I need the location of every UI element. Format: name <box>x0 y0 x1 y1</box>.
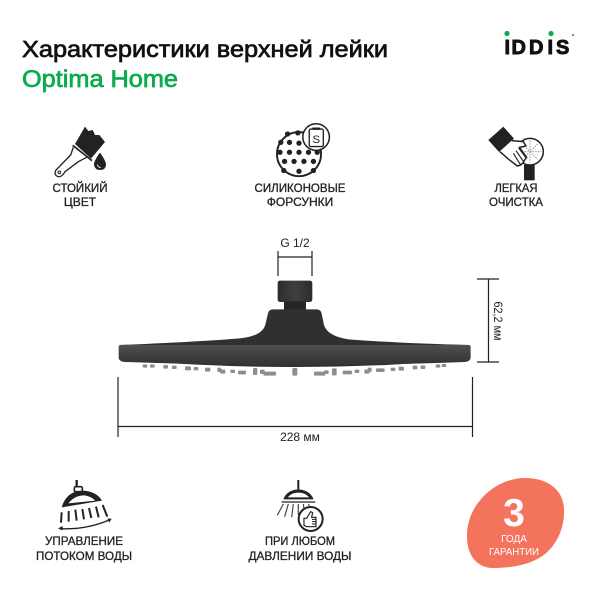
connector <box>278 281 312 302</box>
label: легкая очистка <box>489 181 543 209</box>
logo: IDDIS: IDDIS <box>504 37 569 59</box>
icon: easy cleaning <box>488 127 543 180</box>
dimension: width 228 mm <box>118 377 472 444</box>
warranty badge <box>467 478 564 568</box>
label: силиконовые форсунки <box>254 181 346 209</box>
icon: paint brush <box>55 127 106 177</box>
icon: silicone nozzles: S <box>312 134 320 146</box>
label: стойкий цвет: СТОЙКИЙ <box>52 180 108 195</box>
icon: flow control <box>58 480 112 530</box>
warranty badge: 3 <box>503 492 525 535</box>
label: легкая очистка: ЛЕГКАЯ <box>494 181 538 195</box>
collar and top <box>119 309 471 347</box>
dimension: G 1/2: G 1/2 <box>280 236 310 250</box>
label: управление потоком воды <box>36 534 132 563</box>
label: при любом давлении воды: ПРИ ЛЮБОМ <box>265 534 335 548</box>
dimension: height 62,2 mm: 62,2 мм <box>491 302 505 340</box>
dimension: height 62,2 mm <box>477 279 505 362</box>
dimension: G 1/2 <box>278 236 312 276</box>
label: стойкий цвет: ЦВЕТ <box>64 195 97 209</box>
nozzles <box>143 364 446 376</box>
label: стойкий цвет <box>52 180 108 209</box>
underside <box>133 361 457 367</box>
subtitle: Optima Home: Optima Home <box>22 66 178 93</box>
label: при любом давлении воды: ДАВЛЕНИИ ВОДЫ <box>248 549 352 563</box>
label: при любом давлении воды <box>248 534 352 563</box>
warranty badge: ГОДА <box>501 534 527 545</box>
label: силиконовые форсунки: СИЛИКОНОВЫЕ <box>254 181 346 195</box>
label: легкая очистка: ОЧИСТКА <box>489 195 543 209</box>
rim <box>119 345 471 366</box>
dimension: width 228 mm: 228 мм <box>280 430 320 444</box>
label: управление потоком воды: ПОТОКОМ ВОДЫ <box>36 549 132 563</box>
warranty badge: ГАРАНТИИ <box>489 547 539 558</box>
label: силиконовые форсунки: ФОРСУНКИ <box>267 195 333 209</box>
shower head product <box>119 281 471 376</box>
label: управление потоком воды: УПРАВЛЕНИЕ <box>45 534 123 548</box>
icon: any water pressure <box>277 480 323 531</box>
icon: silicone nozzles <box>277 124 329 176</box>
title: Характеристики верхней лейки <box>22 36 388 62</box>
